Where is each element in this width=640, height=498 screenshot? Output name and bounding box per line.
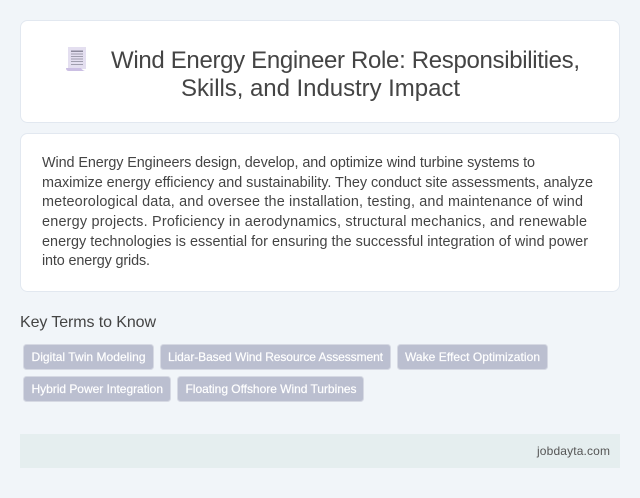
icon: document scroll bbox=[66, 47, 86, 71]
chip: floating offshore wind turbines: Floating Offshore Wind Turbines bbox=[186, 382, 356, 396]
chip: digital twin modeling bbox=[24, 344, 154, 370]
description text: Wind Energy Engineers design, develop, and optimize wind turbine systems to bbox=[42, 155, 535, 171]
description text bbox=[42, 155, 593, 269]
title: Skills, and Industry Impact bbox=[181, 75, 460, 102]
heading: key terms: Key Terms to Know bbox=[20, 314, 156, 331]
description text: into energy grids. bbox=[42, 253, 150, 269]
chip: lidar-based assessment bbox=[160, 344, 390, 370]
footer bar bbox=[20, 434, 620, 468]
chip: wake effect optimization: Wake Effect Optimization bbox=[405, 350, 540, 364]
title: Wind Energy Engineer Role: Responsibilities, bbox=[111, 47, 580, 74]
chip: hybrid power integration bbox=[24, 376, 170, 402]
chip: floating offshore wind turbines bbox=[178, 376, 364, 402]
chip: hybrid power integration: Hybrid Power Integration bbox=[32, 382, 163, 396]
panel: title card bbox=[20, 20, 620, 122]
footer bar: jobdayta.com bbox=[536, 444, 610, 458]
description text: maximize energy efficiency and sustainability. They conduct site assessments, analyze bbox=[42, 175, 593, 191]
title bbox=[111, 47, 580, 102]
description text: energy technologies is essential for ensuring the successful integration of wind power bbox=[42, 234, 588, 250]
chip: lidar-based assessment: Lidar-Based Wind Resource Assessment bbox=[168, 350, 384, 364]
description text: meteorological data, and oversee the installation, testing, and maintenance of wind bbox=[42, 194, 583, 210]
chip: digital twin modeling: Digital Twin Modeling bbox=[32, 350, 146, 364]
chip: wake effect optimization bbox=[398, 344, 548, 370]
panel: description bbox=[20, 134, 620, 292]
description text: energy projects. Proficiency in aerodynamics, structural mechanics, and renewable bbox=[42, 214, 587, 230]
